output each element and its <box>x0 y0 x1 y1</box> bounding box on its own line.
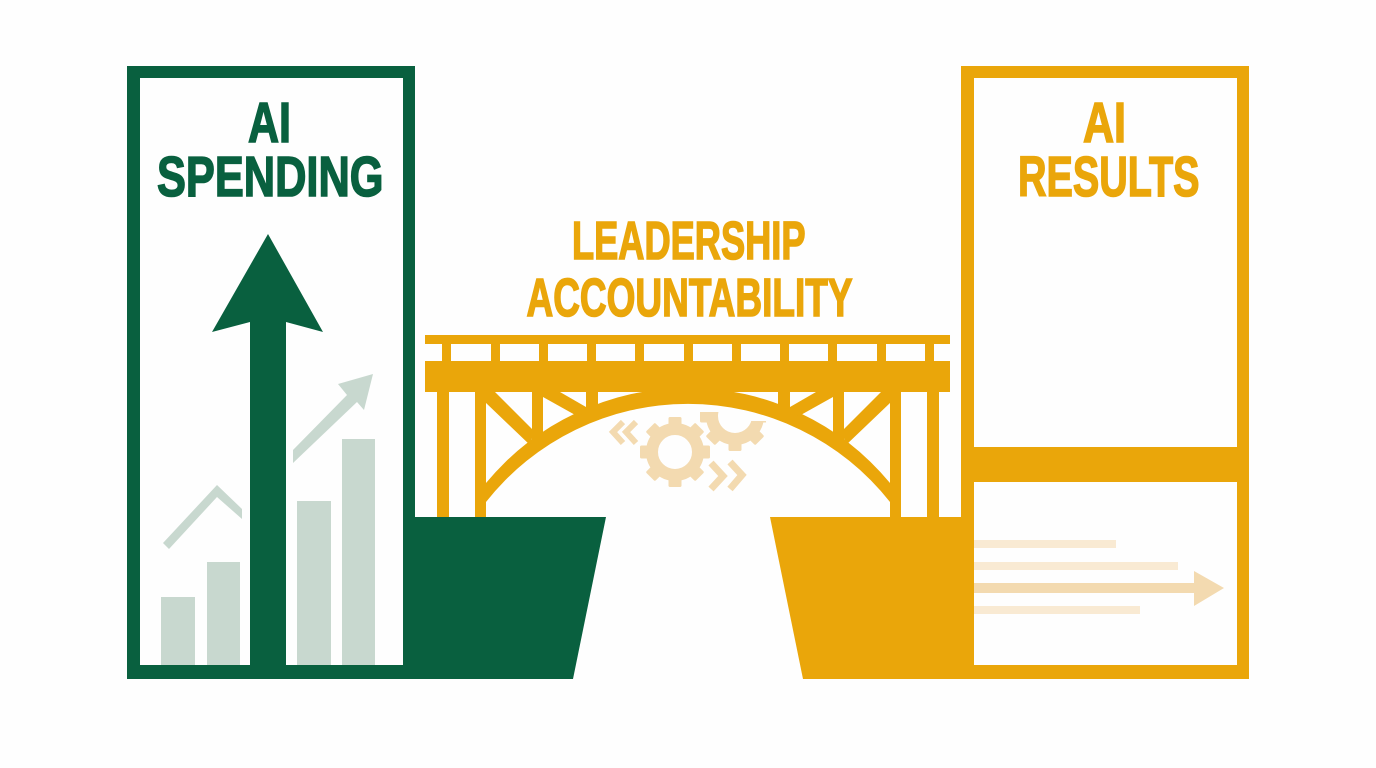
bridge arch <box>486 388 890 502</box>
infographic: bridge between AI spending and AI results <box>127 66 1249 679</box>
icon: small chevron trend line <box>163 485 242 549</box>
bridge columns <box>437 390 939 518</box>
heading: Leadership Accountability <box>526 212 852 328</box>
panel: AI results <box>961 66 1249 679</box>
icon: small rising arrow <box>293 374 373 463</box>
right cliff <box>770 517 974 679</box>
bridge <box>425 335 950 518</box>
faint progress lines <box>974 540 1178 614</box>
amber frame with two windows <box>961 66 1249 679</box>
heading: AI Spending: AI <box>248 91 291 155</box>
bridge deck <box>425 361 950 392</box>
bridge railing <box>425 335 950 364</box>
icon: right chevrons <box>711 462 742 489</box>
arrow: large upward spending arrow <box>212 234 323 670</box>
heading: AI Results: AI <box>1083 91 1126 155</box>
heading: Leadership Accountability: ACCOUNTABILITY <box>526 269 852 328</box>
green frame <box>127 66 415 679</box>
heading: AI Results <box>1018 91 1200 209</box>
icon: main gear <box>640 417 710 487</box>
heading: AI Spending: SPENDING <box>157 145 384 209</box>
heading: AI Results: RESULTS <box>1018 145 1200 209</box>
heading: Leadership Accountability: LEADERSHIP <box>572 212 806 271</box>
panel: AI spending <box>127 66 415 679</box>
icon: gears and chevrons under the bridge <box>609 412 766 492</box>
icon: partial gear <box>700 412 766 451</box>
icon: left chevrons <box>613 422 636 443</box>
heading: AI Spending <box>157 91 384 209</box>
left cliff <box>403 517 606 679</box>
bridge trusses <box>484 390 892 446</box>
arrow: flat results arrow <box>974 571 1224 606</box>
bar chart: rising light bars <box>161 439 375 665</box>
